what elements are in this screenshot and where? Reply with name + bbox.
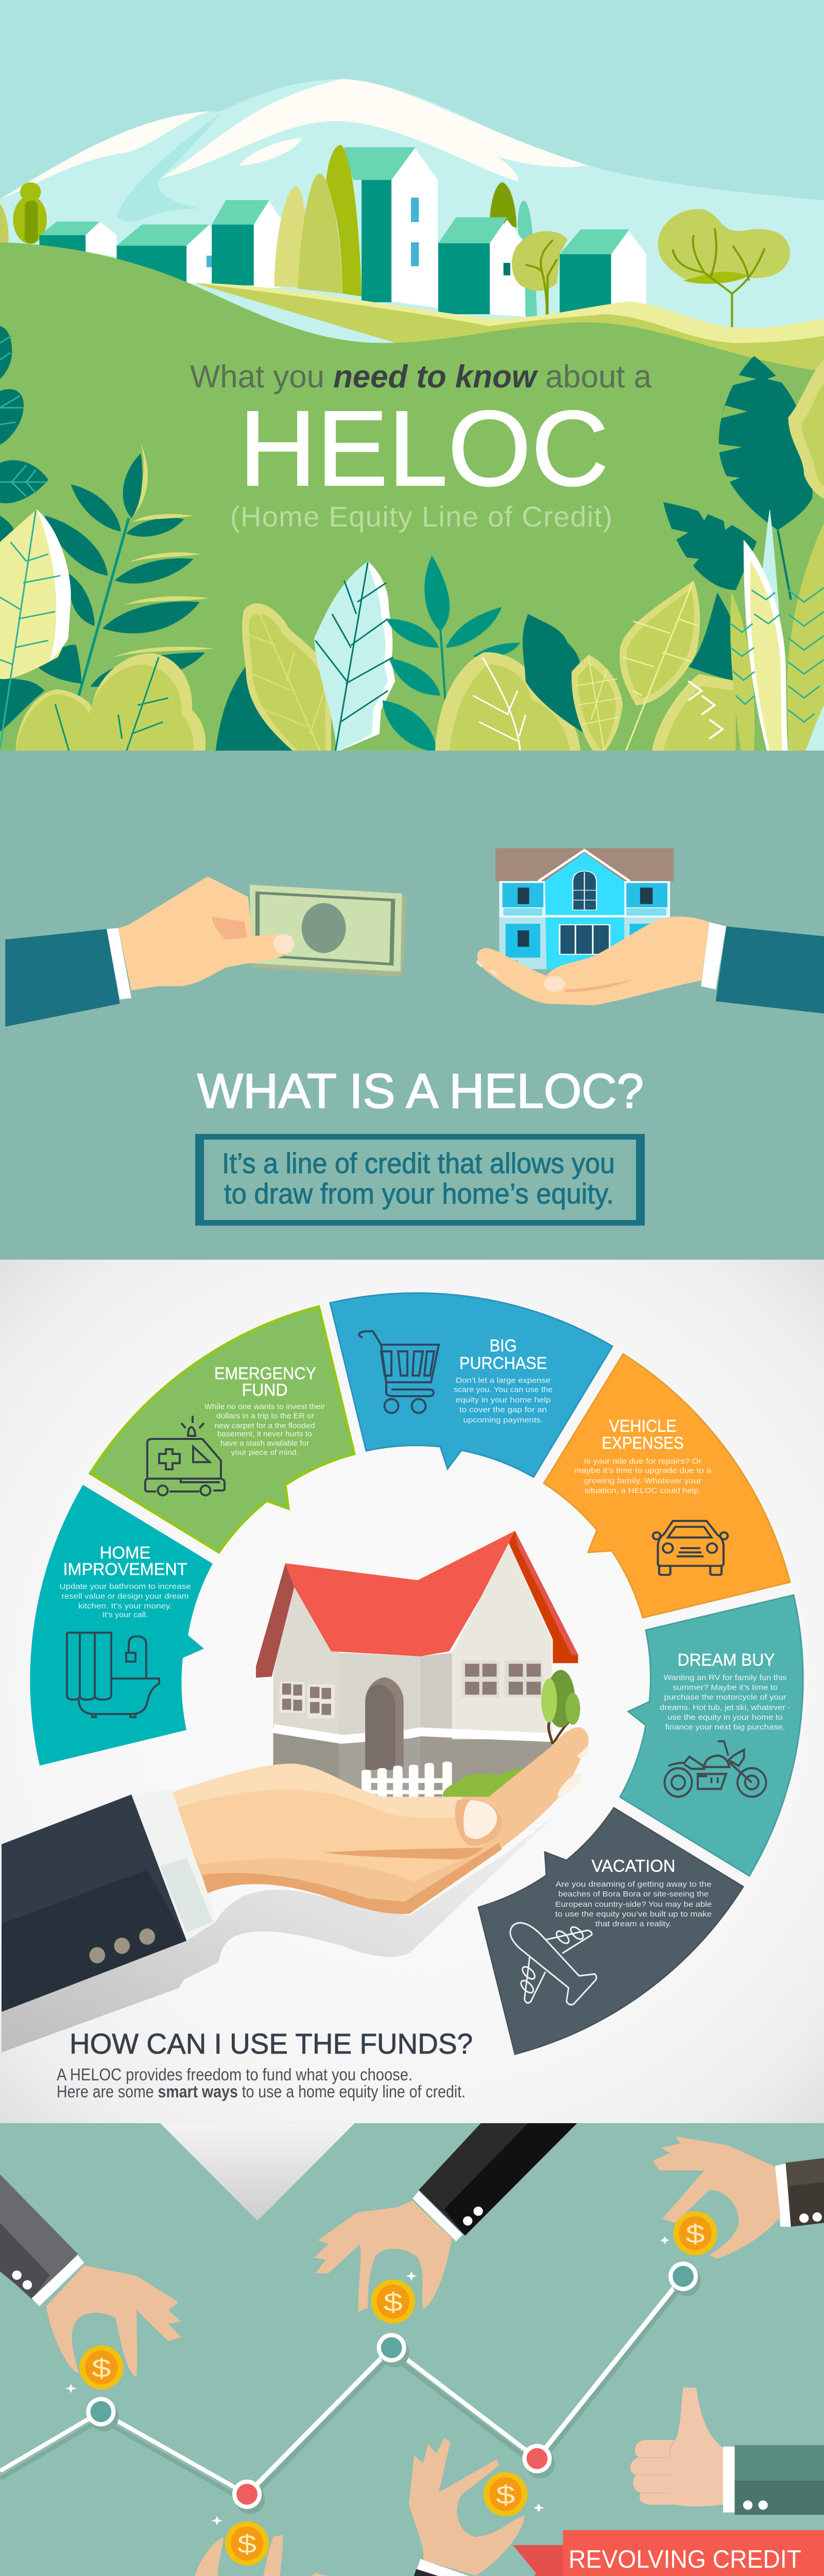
segment: emergency fund <box>90 1307 354 1552</box>
rolling hills <box>0 242 824 752</box>
fence <box>362 1761 452 1800</box>
bush <box>443 1768 525 1797</box>
segment: emergency fund: FUND <box>242 1380 287 1399</box>
segment: vacation: to use the equity you’ve built up to make <box>555 1910 712 1919</box>
segment: dream buy: DREAM BUY <box>678 1650 775 1669</box>
icon: left hand and sleeve <box>5 876 294 1027</box>
segment: home improvement: IMPROVEMENT <box>63 1560 187 1579</box>
icon: ambulance <box>145 1416 225 1495</box>
segment: vacation: VACATION <box>591 1856 676 1875</box>
heading: WHAT IS A HELOC? <box>197 1064 644 1118</box>
ribbon title: REVOLVING CREDIT <box>569 2546 801 2573</box>
pointer triangle <box>160 2123 355 2221</box>
intro text <box>57 2065 466 2101</box>
segment: emergency fund: dollars in a trip to the ER or <box>216 1412 314 1420</box>
coins: $ <box>685 2219 705 2248</box>
heading: HOW CAN I USE THE FUNDS? <box>70 2027 473 2060</box>
coins <box>79 2211 717 2566</box>
icon: bathtub <box>67 1633 159 1717</box>
segment: vacation: that dream a reality. <box>595 1920 672 1928</box>
mountain <box>0 79 824 365</box>
segment: dream buy: purchase the motorcycle of your <box>664 1693 786 1702</box>
icon: top-left hand <box>0 2174 181 2377</box>
icon: top-middle hand <box>314 2123 577 2312</box>
panel: hero landscape <box>0 0 824 752</box>
icon: blue house <box>495 848 674 969</box>
illustration: hand holding house <box>2 1531 589 2053</box>
segment: vacation: beaches of Bora Bora or site-seeing the <box>558 1890 709 1899</box>
segment: home improvement: resell value or design your dream <box>62 1592 188 1601</box>
icon: airplane <box>510 1923 596 2005</box>
icon: bottom-left hand <box>62 2535 326 2576</box>
segment: home improvement: HOME <box>100 1543 150 1562</box>
section background <box>0 1260 824 2123</box>
icon: banknote <box>250 885 407 977</box>
coins: $ <box>496 2480 515 2509</box>
segment: dream buy: use the equity in your home to <box>667 1713 783 1722</box>
segment: emergency fund: EMERGENCY <box>214 1364 316 1383</box>
segment: big purchase: to cover the gap for an <box>459 1405 547 1414</box>
segment: big purchase: PURCHASE <box>459 1353 547 1372</box>
segment: home improvement: Update your bathroom to increase <box>60 1582 191 1591</box>
segment: home improvement: It’s your call. <box>102 1611 148 1619</box>
segment: vehicle expenses: VEHICLE <box>609 1416 677 1435</box>
hero artwork <box>0 0 824 752</box>
segment: vehicle expenses: maybe it’s time to upgrade due to a <box>574 1466 712 1475</box>
title subtitle: (Home Equity Line of Credit) <box>230 500 612 533</box>
segment: vacation: European country-side? You may be able <box>555 1900 712 1909</box>
sparkles <box>65 2236 670 2526</box>
segment: home improvement: kitchen. It’s your money. <box>78 1602 172 1611</box>
trees and houses on the hill <box>0 145 790 327</box>
title lead-in: What you need to know about a <box>190 359 652 395</box>
callout box <box>195 1134 645 1226</box>
panel: what is a HELOC <box>0 751 824 1260</box>
icon: bottom-middle hand <box>365 2438 524 2576</box>
icon: shopping cart <box>359 1331 439 1413</box>
house <box>256 1531 578 1804</box>
hand <box>174 1727 589 1914</box>
intro text: A HELOC provides freedom to fund what you choose. <box>57 2065 413 2084</box>
illustration: line chart with hands and coins <box>0 2123 824 2576</box>
icon: right hand and sleeve <box>476 917 824 1013</box>
segment: big purchase <box>330 1293 612 1477</box>
illustration: hands exchanging money and house <box>5 848 824 1027</box>
segment: emergency fund: have a stash available for <box>220 1439 309 1448</box>
segment: emergency fund: your piece of mind. <box>231 1448 299 1457</box>
foliage center <box>215 555 623 752</box>
section background <box>0 751 824 1260</box>
segment: dream buy: summer? Maybe it’s time to <box>673 1683 778 1692</box>
coins: $ <box>384 2287 403 2316</box>
coins: $ <box>237 2530 256 2558</box>
tree <box>541 1670 580 1744</box>
line chart <box>0 2262 701 2514</box>
icon: thumbs up <box>630 2387 824 2515</box>
segment: vehicle expenses: EXPENSES <box>602 1433 684 1452</box>
segment: dream buy: finance your next big purchase. <box>665 1723 785 1732</box>
coins: $ <box>92 2353 111 2382</box>
segment: big purchase: Don’t let a large expense <box>456 1376 551 1385</box>
segment: big purchase: BIG <box>489 1336 517 1355</box>
segment: vehicle expenses <box>544 1354 790 1618</box>
segment: dream buy <box>620 1595 803 1876</box>
section background <box>0 2123 824 2576</box>
segment: big purchase: scare you. You can use the <box>454 1385 553 1394</box>
segment: vacation <box>478 1808 743 2054</box>
icon: top-right hand <box>653 2137 824 2259</box>
intro text: Here are some smart ways to use a home equity line of credit. <box>57 2082 466 2101</box>
sky <box>0 0 824 752</box>
segment: vacation: Are you dreaming of getting away to the <box>555 1880 712 1889</box>
icon: car <box>653 1521 728 1575</box>
segment: vehicle expenses: situation, a HELOC could help. <box>585 1486 701 1495</box>
segment: vehicle expenses: Is your ride due for repairs? Or <box>584 1457 701 1466</box>
hero title <box>190 359 652 533</box>
callout box: to draw from your home’s equity. <box>224 1177 614 1210</box>
segment: big purchase: upcoming payments. <box>464 1416 543 1425</box>
hand shadow <box>2 1814 557 2053</box>
callout text: It’s a line of credit that allows you <box>222 1147 615 1179</box>
segment: emergency fund: While no one wants to invest their <box>204 1402 325 1411</box>
icon: motorcycle <box>664 1741 766 1797</box>
suit sleeve <box>2 1790 216 2012</box>
foliage left <box>0 326 214 752</box>
segment: emergency fund: basement, it never hurts to <box>217 1430 312 1438</box>
segment: vehicle expenses: growing family. Whatever your <box>584 1477 701 1485</box>
foliage right <box>620 356 824 752</box>
panel: revolving credit <box>0 2123 824 2576</box>
segment: dream buy: dreams. Hot tub, jet ski, whatever - <box>660 1703 791 1712</box>
ribbon <box>513 2530 824 2576</box>
segment: emergency fund: new carpet for a the flooded <box>214 1421 315 1430</box>
title HELOC: HELOC <box>239 389 609 509</box>
panel: how can I use the funds <box>0 1260 824 2123</box>
segment: big purchase: equity in your home help <box>455 1396 551 1404</box>
segment: home improvement <box>30 1485 213 1766</box>
segment: dream buy: Wanting an RV for family fun this <box>663 1673 787 1682</box>
